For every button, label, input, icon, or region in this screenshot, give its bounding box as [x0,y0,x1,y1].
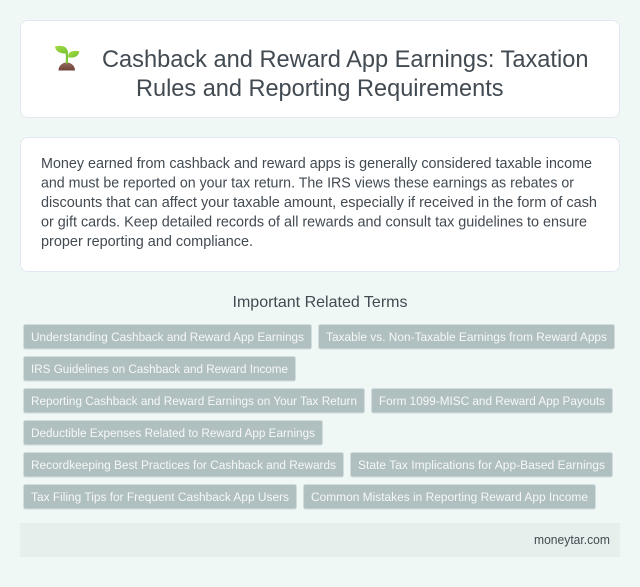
text block: summary: Money earned from cashback and reward apps is generally considered taxable income [41,156,592,172]
text block: summary: discounts that can affect your taxable amount, especially if received in the form of cash [41,195,597,211]
panel: title card [20,20,620,118]
tag: IRS Guidelines on Cashback and Reward Income [31,362,288,376]
tag [304,484,596,509]
panel: summary card [20,138,620,272]
icon: seedling [55,46,79,70]
heading: Rules and Reporting Requirements [136,75,504,102]
heading [102,46,588,102]
tag [318,324,614,349]
tag [372,388,612,413]
text block: summary: and must be reported on your tax return. The IRS views these earnings as rebates or [41,176,574,192]
text block: summary: or gift cards. Keep detailed records of all rewards and consult tax guidelines to ensure [41,214,587,230]
tag [24,388,364,413]
tag: Recordkeeping Best Practices for Cashback and Rewards [31,458,336,472]
tag: Common Mistakes in Reporting Reward App Income [311,490,588,504]
footer bar [20,523,620,557]
tag: Tax Filing Tips for Frequent Cashback App Users [31,490,289,504]
text block: summary: proper reporting and compliance. [41,234,253,250]
tag: State Tax Implications for App-Based Earnings [358,458,605,472]
tag: Understanding Cashback and Reward App Earnings [31,330,304,344]
tag [24,356,296,381]
tag: Reporting Cashback and Reward Earnings on Your Tax Return [31,394,357,408]
heading: related terms: Important Related Terms [232,294,408,311]
footer source text: moneytar.com [534,533,610,547]
tag: Form 1099-MISC and Reward App Payouts [379,394,605,408]
tag [24,420,322,445]
tag [350,452,612,477]
heading: Cashback and Reward App Earnings: Taxation [102,46,588,73]
tag [24,324,312,349]
text block: summary [41,156,597,250]
tag [24,452,344,477]
tag: Deductible Expenses Related to Reward App Earnings [31,426,315,440]
tag: Taxable vs. Non-Taxable Earnings from Reward Apps [326,330,607,344]
tag [24,484,296,509]
